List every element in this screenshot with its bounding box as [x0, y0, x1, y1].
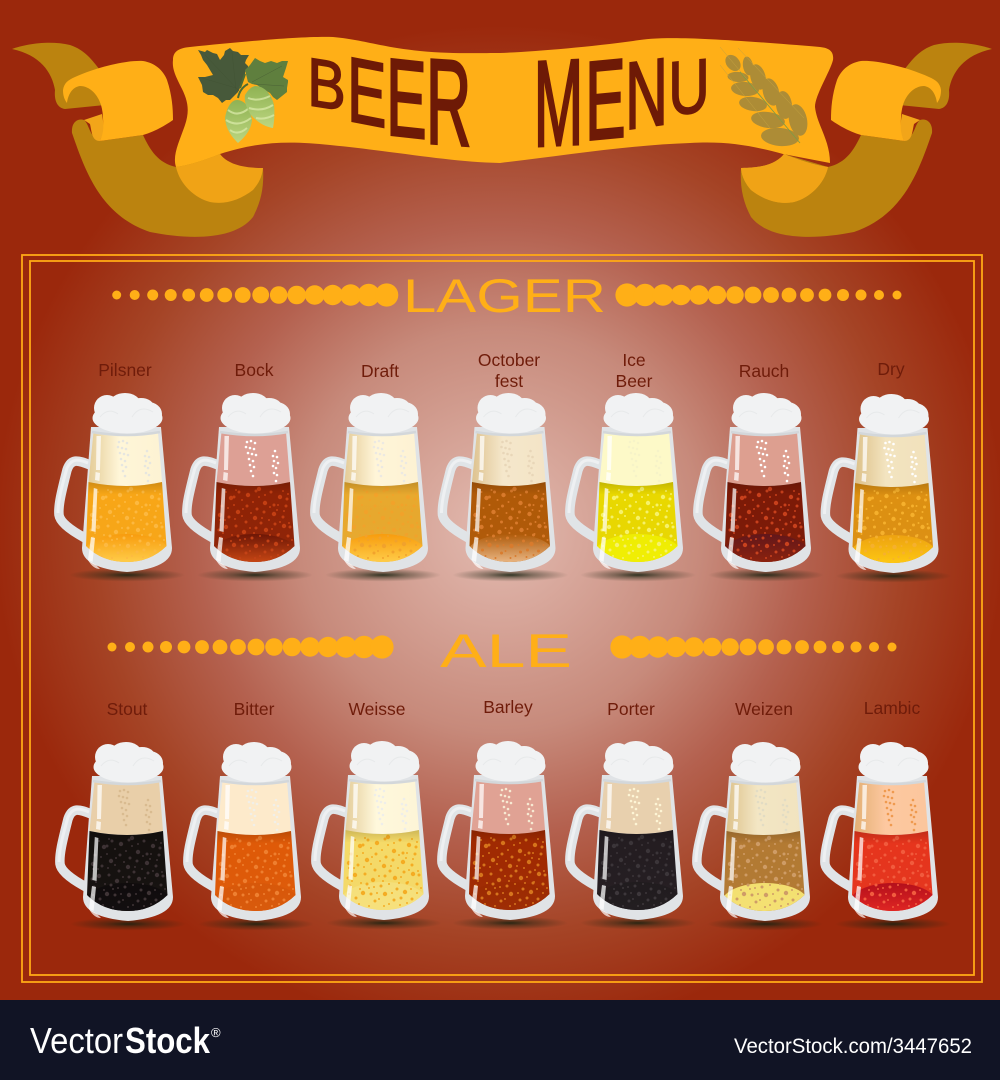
- beer names: Barley: [483, 697, 533, 717]
- mug: Bitter: [187, 742, 314, 930]
- title: BEER: E: [386, 35, 426, 162]
- beer names: [107, 697, 920, 719]
- dot row right: [610, 635, 896, 659]
- footer logo: VectorStock: Vector: [30, 1020, 123, 1061]
- mug: Pilsner: [58, 393, 185, 582]
- beer names: [98, 350, 905, 391]
- title: BEER: [307, 34, 471, 172]
- right fold overlap: [741, 154, 828, 203]
- beer names: Ice: [622, 350, 646, 370]
- beer names: Pilsner: [98, 360, 152, 380]
- beer names: Bock: [235, 360, 274, 380]
- dot row left: [112, 283, 398, 307]
- dark hop leaf: [198, 48, 249, 103]
- beer names: fest: [495, 371, 523, 391]
- beer names: Weisse: [348, 699, 406, 719]
- title: MENU: [534, 34, 710, 173]
- mug: Bock: [186, 393, 313, 582]
- mug: Dry: [824, 394, 952, 582]
- icon: wheat ear: [720, 47, 810, 148]
- beer names: Beer: [616, 371, 653, 391]
- beer names: Lambic: [864, 698, 920, 718]
- mug: Porter: [569, 741, 696, 930]
- dot row left: [108, 635, 394, 659]
- title: MENU: E: [585, 37, 625, 165]
- beer names: Rauch: [739, 361, 789, 381]
- green hop leaf: [245, 58, 288, 100]
- heading: ALE: ALE: [440, 624, 572, 677]
- beer names: Draft: [361, 361, 399, 381]
- double frame: [22, 255, 982, 982]
- mug: Draft: [314, 393, 441, 582]
- title: MENU: N: [625, 37, 668, 150]
- beer names: October: [478, 350, 540, 370]
- footer logo: VectorStock: [30, 1020, 221, 1061]
- main banner: [173, 37, 833, 167]
- banner ribbon: [12, 37, 992, 237]
- section: Ale: [59, 624, 951, 930]
- mug: Rauch: [697, 393, 824, 582]
- beer names: Weizen: [735, 699, 793, 719]
- mug: Ice Beer: [569, 393, 696, 582]
- mug: October fest: [442, 393, 568, 582]
- mug: Barley: [441, 741, 568, 930]
- hop cone right: [245, 86, 274, 128]
- title: BEER: B: [307, 44, 346, 126]
- title: MENU: M: [534, 34, 583, 173]
- footer logo: VectorStock: ®: [211, 1025, 221, 1040]
- heading: LAGER: LAGER: [403, 269, 606, 322]
- footer image id: VectorStock.com/3447652: [734, 1035, 972, 1058]
- mug: Weizen: [696, 742, 823, 930]
- right ribbon tail: [741, 43, 992, 237]
- title: BEER: R: [426, 34, 471, 172]
- section: Lager: [58, 269, 952, 582]
- icon: hop leaves and cones: [198, 48, 288, 143]
- title: MENU: U: [668, 43, 710, 132]
- beer names: Bitter: [234, 699, 275, 719]
- footer logo: VectorStock: Stock: [125, 1020, 211, 1061]
- footer band: [0, 1000, 1000, 1080]
- beer names: Porter: [607, 699, 655, 719]
- mug: Weisse: [315, 741, 442, 930]
- beer names: Stout: [107, 699, 148, 719]
- title: BEER: E: [347, 38, 386, 148]
- hop cone left: [225, 100, 252, 143]
- mug: Stout: [59, 742, 186, 930]
- beer names: Dry: [877, 359, 905, 379]
- mug: Lambic: [824, 742, 951, 930]
- left ribbon tail: [12, 43, 263, 237]
- dot row right: [615, 283, 902, 307]
